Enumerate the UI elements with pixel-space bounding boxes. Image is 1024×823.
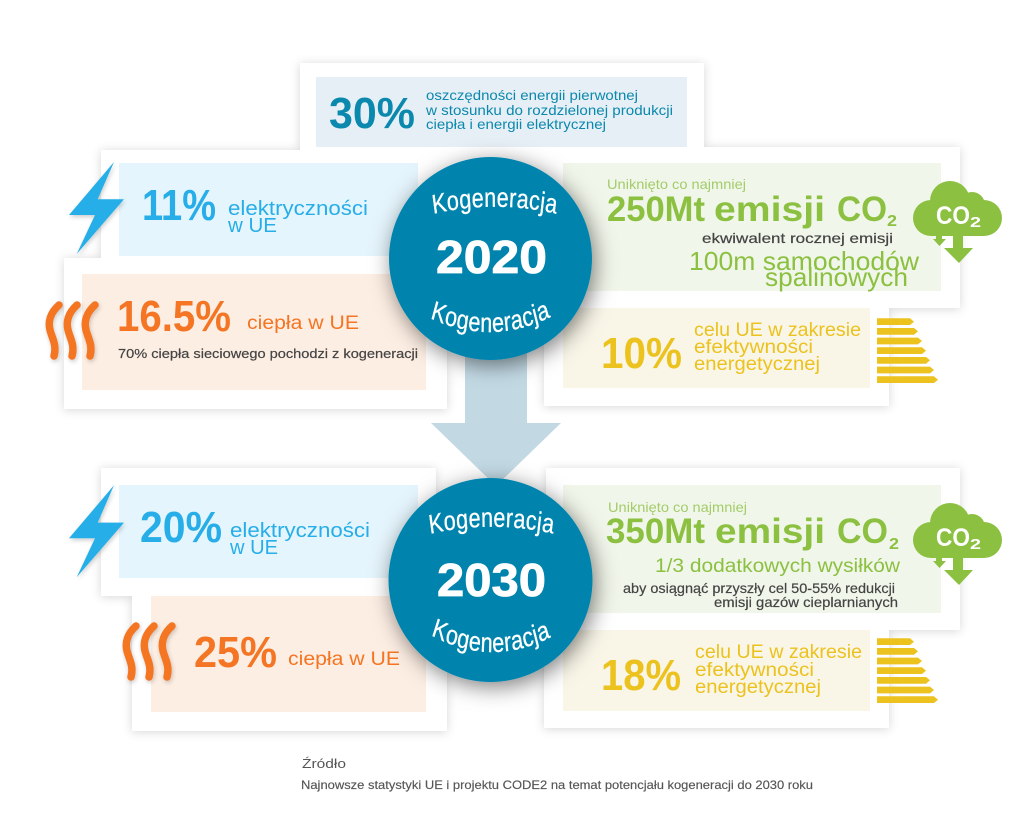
panel: 2030 efficiency target: 18% <box>601 651 681 700</box>
panel: 2030 heat: 25% <box>194 628 277 677</box>
panel: 2030 efficiency target: energetycznej <box>695 677 821 698</box>
arrow: 2020 to 2030 <box>431 350 561 486</box>
panel: 2020 efficiency target: 10% <box>601 329 682 378</box>
badge: Kogeneracja 2030: Kogeneracja <box>432 618 552 654</box>
badge: Kogeneracja 2030: Kogeneracja <box>429 511 554 536</box>
panel: 2020 CO2: spalinowych <box>765 262 908 292</box>
icon: energy bars 2020 <box>877 318 938 383</box>
white card backgrounds <box>64 63 960 731</box>
panel: 2020 CO2 <box>563 163 941 292</box>
badge: Kogeneracja 2030 <box>376 468 611 702</box>
icon: CO2 cloud 2030: 2 <box>970 536 981 553</box>
panel: 2030 electricity: 20% <box>140 503 222 552</box>
panel: 2030 CO2: 2 <box>889 536 899 553</box>
source note: Najnowsze statystyki UE i projektu CODE2 na temat potencjału kogeneracji do 2030 roku <box>301 778 813 792</box>
icon: CO2 cloud 2030: CO <box>936 524 970 552</box>
panel: 2020 CO2: emisji <box>714 190 825 229</box>
badge: Kogeneracja 2020 <box>376 146 610 380</box>
panel: 2020 CO2: CO <box>837 190 887 229</box>
icon: lightning 2020 <box>69 162 124 254</box>
panel: 2020 electricity <box>119 163 418 256</box>
panel: 2030 CO2: 350Mt <box>606 512 705 551</box>
badge: Kogeneracja 2030: 2030 <box>437 554 546 606</box>
panel: primary energy savings: 30% <box>329 89 415 138</box>
icon: lightning 2030 <box>69 485 124 577</box>
icon: CO2 cloud 2020: CO <box>936 202 970 230</box>
panel: 2020 efficiency target <box>563 308 870 388</box>
icon: heat waves 2030 <box>126 626 172 677</box>
panel: 2030 efficiency target: efektywności <box>695 660 814 681</box>
badge: Kogeneracja 2020: Kogeneracja <box>432 191 557 216</box>
icon: CO2 cloud 2030 <box>913 503 1002 585</box>
panel: 2020 CO2: Uniknięto co najmniej <box>607 176 746 192</box>
panel: 2020 CO2: 100m samochodów <box>689 246 919 276</box>
panel: primary energy savings <box>316 77 687 147</box>
panel: 2020 electricity: w UE <box>227 215 277 237</box>
panel: primary energy savings: ciepła i energii elektrycznej <box>426 116 606 132</box>
badge: Kogeneracja 2020: 2020 <box>436 231 547 283</box>
panel: 2030 CO2: emisji <box>715 512 825 551</box>
panel: 2030 electricity: w UE <box>229 537 278 559</box>
panel: 2030 heat <box>151 596 426 712</box>
panel: 2030 efficiency target: celu UE w zakresie <box>695 642 862 663</box>
panel: 2030 electricity <box>119 485 418 578</box>
panel: 2020 efficiency target: celu UE w zakresie <box>694 320 861 341</box>
panel: 2030 heat: ciepła w UE <box>288 649 400 670</box>
panel: 2030 efficiency target <box>563 630 870 711</box>
source note: Źródło <box>302 756 346 771</box>
panel: primary energy savings: w stosunku do rozdzielonej produkcji <box>425 102 673 118</box>
panel: 2030 CO2: Uniknięto co najmniej <box>608 499 747 515</box>
source note <box>301 756 813 792</box>
panel: 2020 CO2: 2 <box>887 213 897 230</box>
panel: 2030 CO2: aby osiągnąć przyszły cel 50-55% redukcji <box>623 580 895 596</box>
panel: 2030 CO2 <box>563 485 941 613</box>
panel: 2030 electricity: elektryczności <box>230 520 370 542</box>
panel: 2020 heat: ciepła w UE <box>247 313 359 334</box>
panel: 2020 efficiency target: efektywności <box>694 337 813 358</box>
icon: CO2 cloud 2020 <box>913 181 1002 263</box>
panel: 2030 CO2: CO <box>837 512 888 551</box>
badge: Kogeneracja 2020: Kogeneracja <box>432 301 551 335</box>
panel: 2020 efficiency target: energetycznej <box>694 354 820 375</box>
icon: CO2 cloud 2020: 2 <box>970 214 981 231</box>
icon: heat waves 2020 <box>49 305 95 356</box>
panel: 2020 heat: 16.5% <box>117 292 231 341</box>
panel: 2020 CO2: 250Mt <box>607 190 705 229</box>
icon: energy bars 2030 <box>877 638 938 703</box>
panel: 2030 CO2: 1/3 dodatkowych wysiłków <box>655 556 900 577</box>
panel: 2030 CO2: emisji gazów cieplarnianych <box>714 594 898 610</box>
panel: 2020 CO2: ekwiwalent rocznej emisji <box>702 230 893 246</box>
panel: primary energy savings: oszczędności energii pierwotnej <box>426 87 638 103</box>
panel: 2020 heat: 70% ciepła sieciowego pochodzi z kogeneracji <box>118 346 418 361</box>
panel: 2020 electricity: elektryczności <box>228 198 368 220</box>
panel: 2020 electricity: 11% <box>142 181 216 230</box>
panel: 2020 heat <box>82 274 426 390</box>
